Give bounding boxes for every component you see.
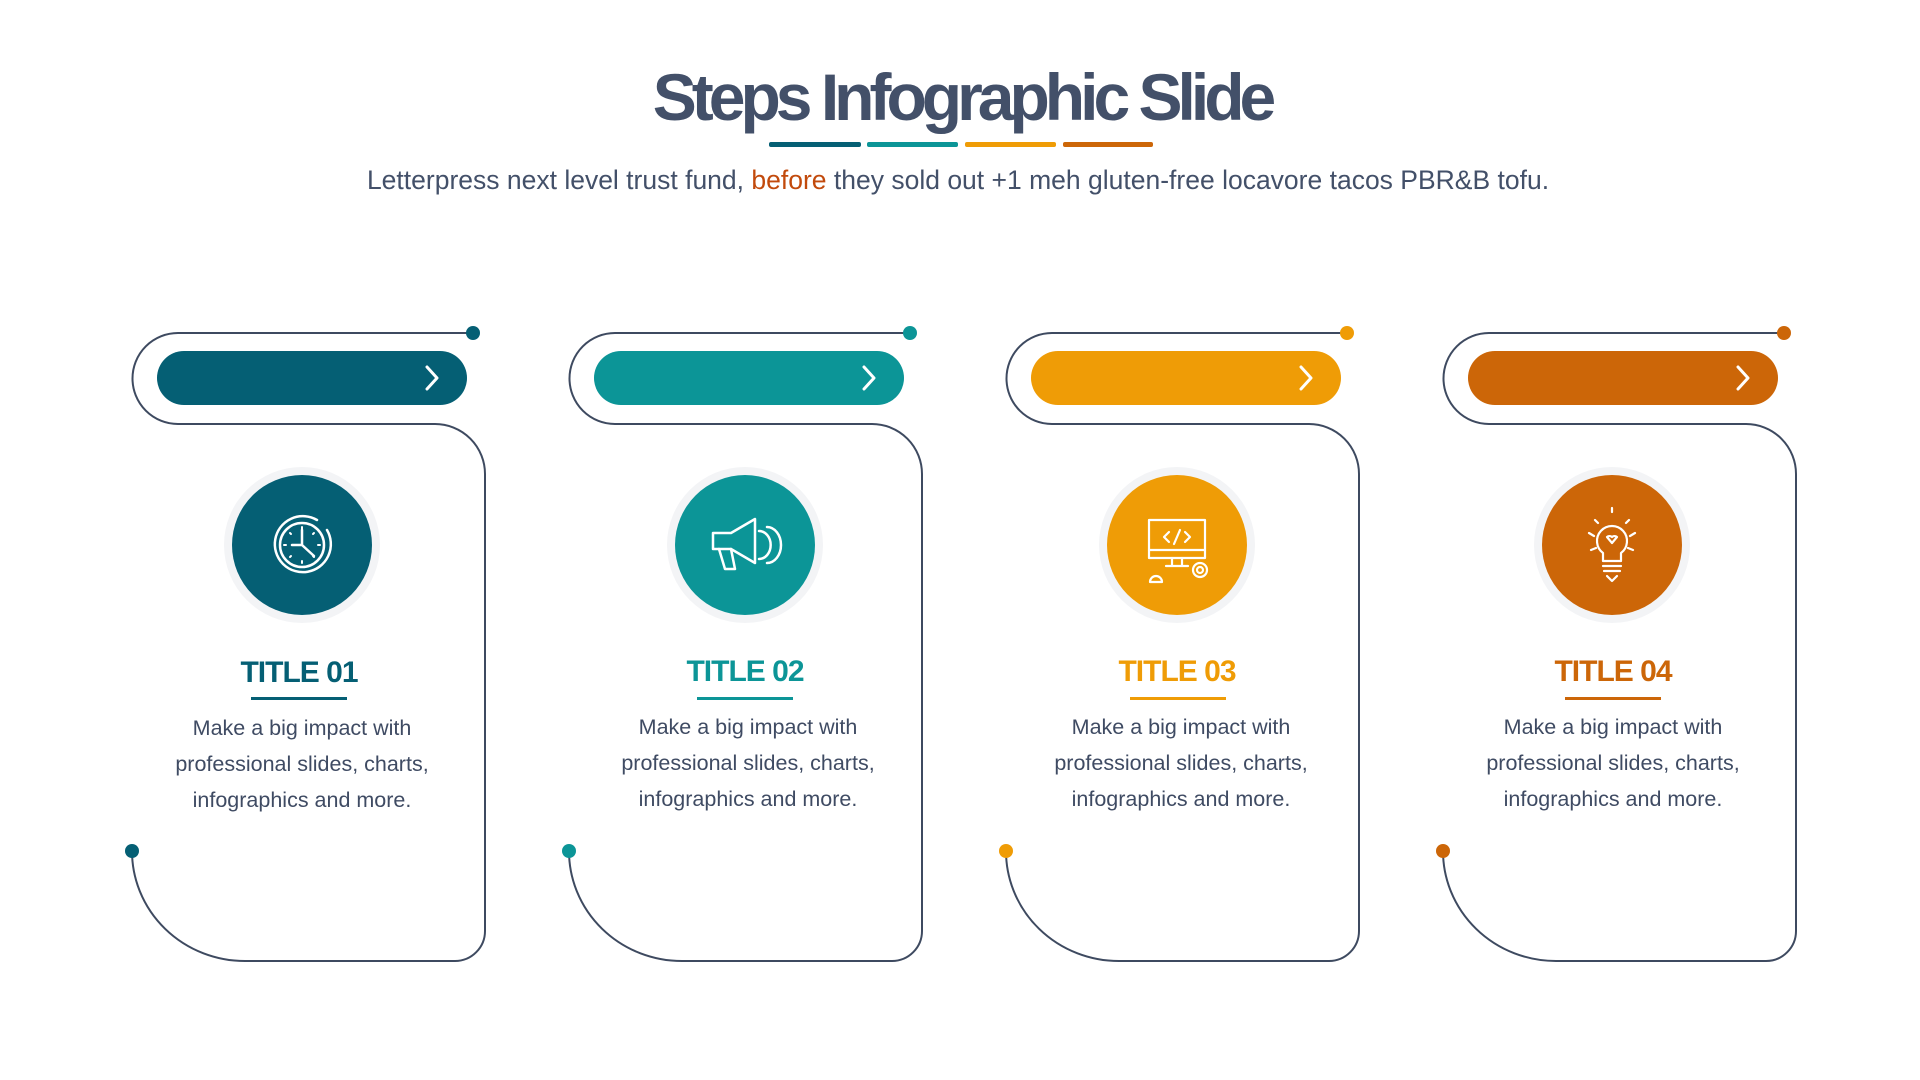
heading: title 01: TITLE 01 xyxy=(240,656,358,689)
panel: step 1 xyxy=(125,326,485,961)
icon: light bulb xyxy=(1589,508,1635,581)
text block: infographics and more. xyxy=(639,787,857,811)
icon: clock xyxy=(275,516,331,572)
text block: infographics and more. xyxy=(1072,787,1290,811)
icon: megaphone xyxy=(713,519,781,569)
text block: professional slides, charts, xyxy=(621,751,875,775)
subtitle: Letterpress next level trust fund, before they sold out +1 meh gluten-free locavore tacos PBR&B tofu. xyxy=(367,165,1549,195)
text block: Make a big impact with xyxy=(1504,715,1722,739)
text block: infographics and more. xyxy=(193,788,411,812)
panel: step 2 xyxy=(562,326,922,961)
text block: Make a big impact with xyxy=(1072,715,1290,739)
text block: Make a big impact with xyxy=(639,715,857,739)
icon: monitor with code and gear xyxy=(1149,520,1207,582)
text block: Make a big impact with xyxy=(193,716,411,740)
panel: step 3 xyxy=(999,326,1359,961)
heading: title 03: TITLE 03 xyxy=(1118,655,1236,688)
title underline xyxy=(769,142,1153,147)
panel: step 4 xyxy=(1436,326,1796,961)
text block: infographics and more. xyxy=(1504,787,1722,811)
heading: title 04: TITLE 04 xyxy=(1554,655,1673,688)
text block: professional slides, charts, xyxy=(1486,751,1740,775)
text block: professional slides, charts, xyxy=(175,752,429,776)
text block: professional slides, charts, xyxy=(1054,751,1308,775)
heading: title 02: TITLE 02 xyxy=(686,655,804,688)
title: Steps Infographic Slide xyxy=(653,60,1275,134)
